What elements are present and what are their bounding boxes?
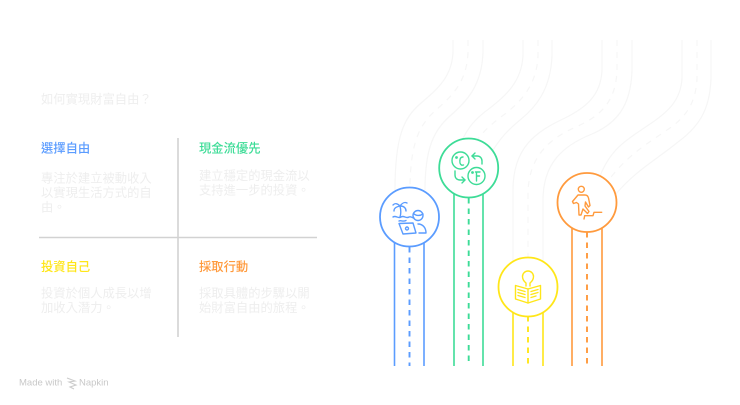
badge: orange circle with person climbing stairs icon (558, 173, 616, 232)
quadrant grid (39, 138, 317, 337)
road: orange (572, 225, 602, 366)
icon: exchange arrows and two coins (452, 152, 485, 184)
heading: choose freedom: 選擇自由 (41, 140, 90, 156)
footer text right: Napkin (79, 378, 109, 388)
road: yellow (513, 310, 543, 366)
text: choose freedom body: 以實現生活方式的自 (41, 185, 152, 200)
panel: invest in yourself (41, 259, 152, 315)
text: cash flow body: 支持進一步的投資。 (199, 182, 310, 198)
panel: cash flow first (199, 140, 310, 198)
icon: palm tree, waves, laptop (393, 202, 426, 234)
heading: invest in yourself: 投資自己 (41, 259, 90, 274)
footer: made with napkin (19, 378, 109, 389)
heading: cash flow first: 現金流優先 (199, 140, 260, 156)
badge: yellow circle with book and lightbulb icon (498, 258, 558, 316)
icon: open book with lightbulb (516, 271, 540, 303)
text: choose freedom body: 專注於建立被動收入 (41, 170, 152, 186)
footer text left: Made with (19, 378, 62, 388)
text: cash flow body: 建立穩定的現金流以 (199, 168, 310, 183)
text: take action body: 始財富自由的旅程。 (199, 300, 310, 315)
panel: choose freedom (41, 140, 152, 214)
panel: take action (199, 259, 310, 315)
road: blue (394, 240, 424, 366)
icon: person climbing steps (572, 186, 602, 219)
icon: napkin logo (67, 378, 76, 389)
text: invest body: 加收入潛力。 (41, 301, 115, 315)
road: green (454, 190, 483, 366)
badge: green circle with currency exchange icon (439, 138, 498, 198)
text: take action body: 採取具體的步驟以開 (199, 286, 310, 300)
badge: blue circle with beach and laptop icon (380, 188, 439, 246)
faint background roads (395, 40, 711, 262)
text: invest body: 投資於個人成長以增 (41, 286, 152, 300)
heading: take action: 採取行動 (199, 259, 248, 274)
text: choose freedom body: 由。 (41, 200, 66, 214)
title: 如何實現財富自由？ (41, 92, 152, 106)
